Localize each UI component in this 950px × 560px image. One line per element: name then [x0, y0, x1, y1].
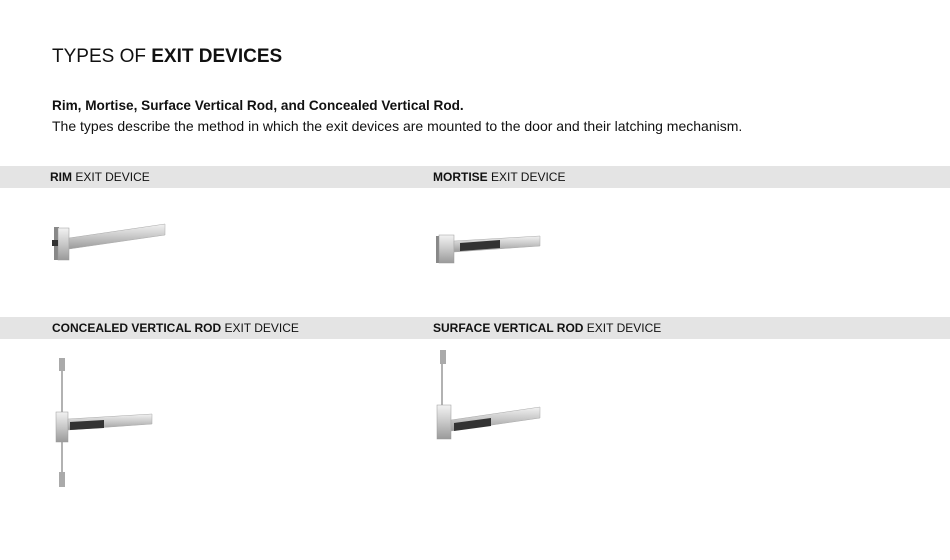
intro text: Rim, Mortise, Surface Vertical Rod, and Concealed Vertical Rod. — [52, 98, 464, 113]
icon: concealed vertical rod device — [56, 358, 152, 487]
intro text: The types describe the method in which the exit devices are mounted to the door and their latching mechanism. — [52, 118, 742, 134]
icon: rim device — [52, 224, 165, 260]
label: surface: SURFACE VERTICAL ROD EXIT DEVICE — [433, 321, 661, 335]
header band: rim / mortise — [0, 166, 950, 188]
label: mortise: MORTISE EXIT DEVICE — [433, 170, 565, 184]
label: concealed: CONCEALED VERTICAL ROD EXIT DEVICE — [52, 321, 299, 335]
title: TYPES OF EXIT DEVICES — [52, 46, 282, 67]
icon: surface vertical rod device — [437, 350, 540, 439]
header band: vertical rods — [0, 317, 950, 339]
icon: mortise device — [436, 235, 540, 263]
label: rim: RIM EXIT DEVICE — [50, 170, 150, 184]
intro text — [52, 98, 742, 134]
